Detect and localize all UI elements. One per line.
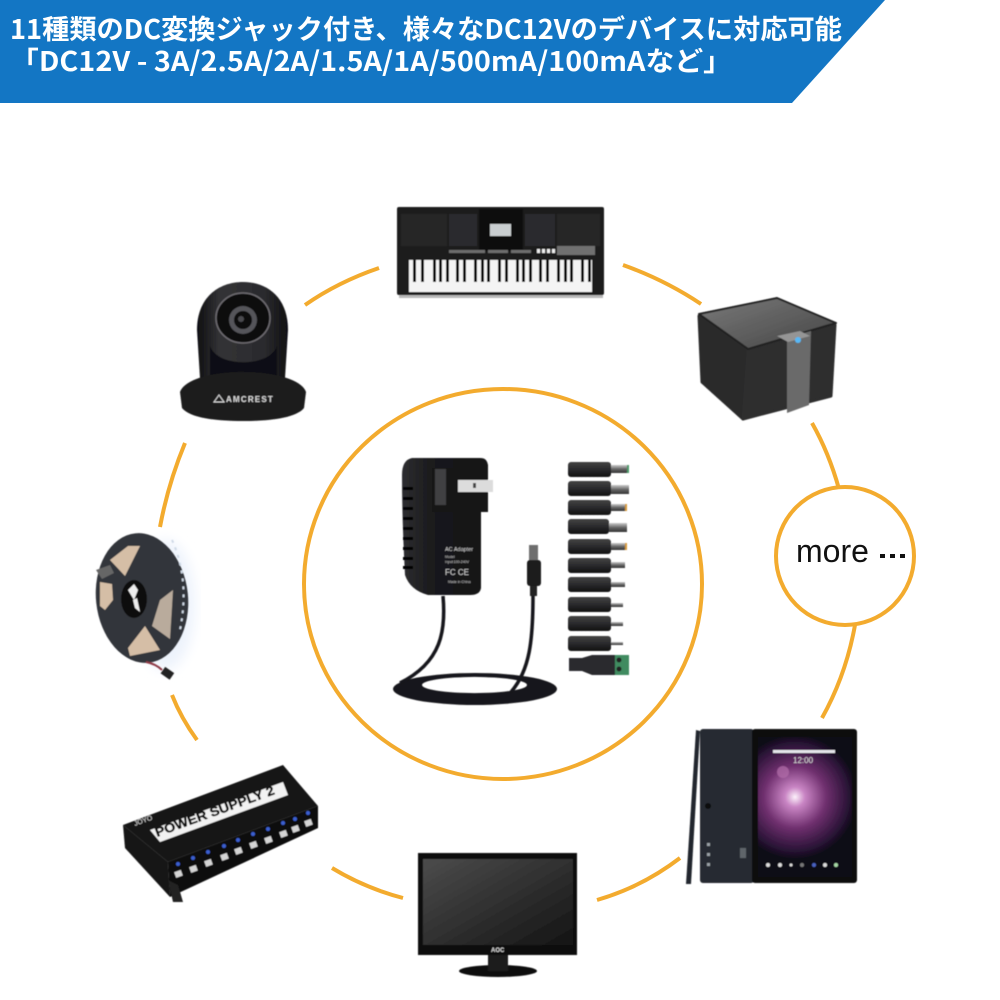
connecting orange arcs — [160, 265, 855, 900]
brand label: JOYO — [133, 815, 154, 828]
coiled cable — [393, 673, 557, 705]
adapter label: Input:100-240V — [445, 560, 470, 564]
plug blade — [458, 480, 493, 492]
power adapter — [393, 458, 557, 705]
device: LED strip reel — [89, 529, 195, 680]
device: security camera — [180, 282, 306, 421]
ellipsis dots — [880, 554, 905, 558]
more circle — [776, 487, 914, 625]
device: monitor — [418, 853, 577, 977]
device: power supply — [123, 765, 318, 902]
device: tablet — [686, 729, 857, 884]
header banner — [0, 0, 885, 103]
power supply label: POWER SUPPLY 2 — [153, 783, 276, 840]
adapter label: AC Adapter — [445, 547, 473, 553]
more label: more — [796, 533, 869, 569]
headline line 1: 11種類のDC変換ジャック付き、様々なDC12Vのデバイスに対応可能 — [10, 8, 842, 47]
adapter label: Made in China — [448, 580, 471, 584]
tablet clock: 12:00 — [793, 756, 814, 765]
device: bluetooth speaker — [699, 298, 836, 419]
terminal block adapter — [569, 655, 615, 675]
vents — [403, 487, 413, 569]
cable run — [400, 595, 533, 692]
monitor brand: AOC — [491, 948, 505, 954]
wall plug body — [402, 458, 488, 595]
DC barrel plug — [529, 545, 538, 561]
adapter label: FC CE — [445, 568, 469, 577]
adapter label: Model — [445, 555, 455, 559]
stylus — [686, 730, 700, 884]
camera logo: AMCREST — [226, 395, 274, 404]
central circle — [304, 389, 702, 779]
device: electronic keyboard — [397, 207, 604, 298]
adapter label — [445, 547, 473, 584]
headline line 2: 「DC12V - 3A/2.5A/2A/1.5A/1A/500mA/100mAなど」 — [10, 40, 732, 79]
DC jack adapters — [568, 462, 629, 675]
